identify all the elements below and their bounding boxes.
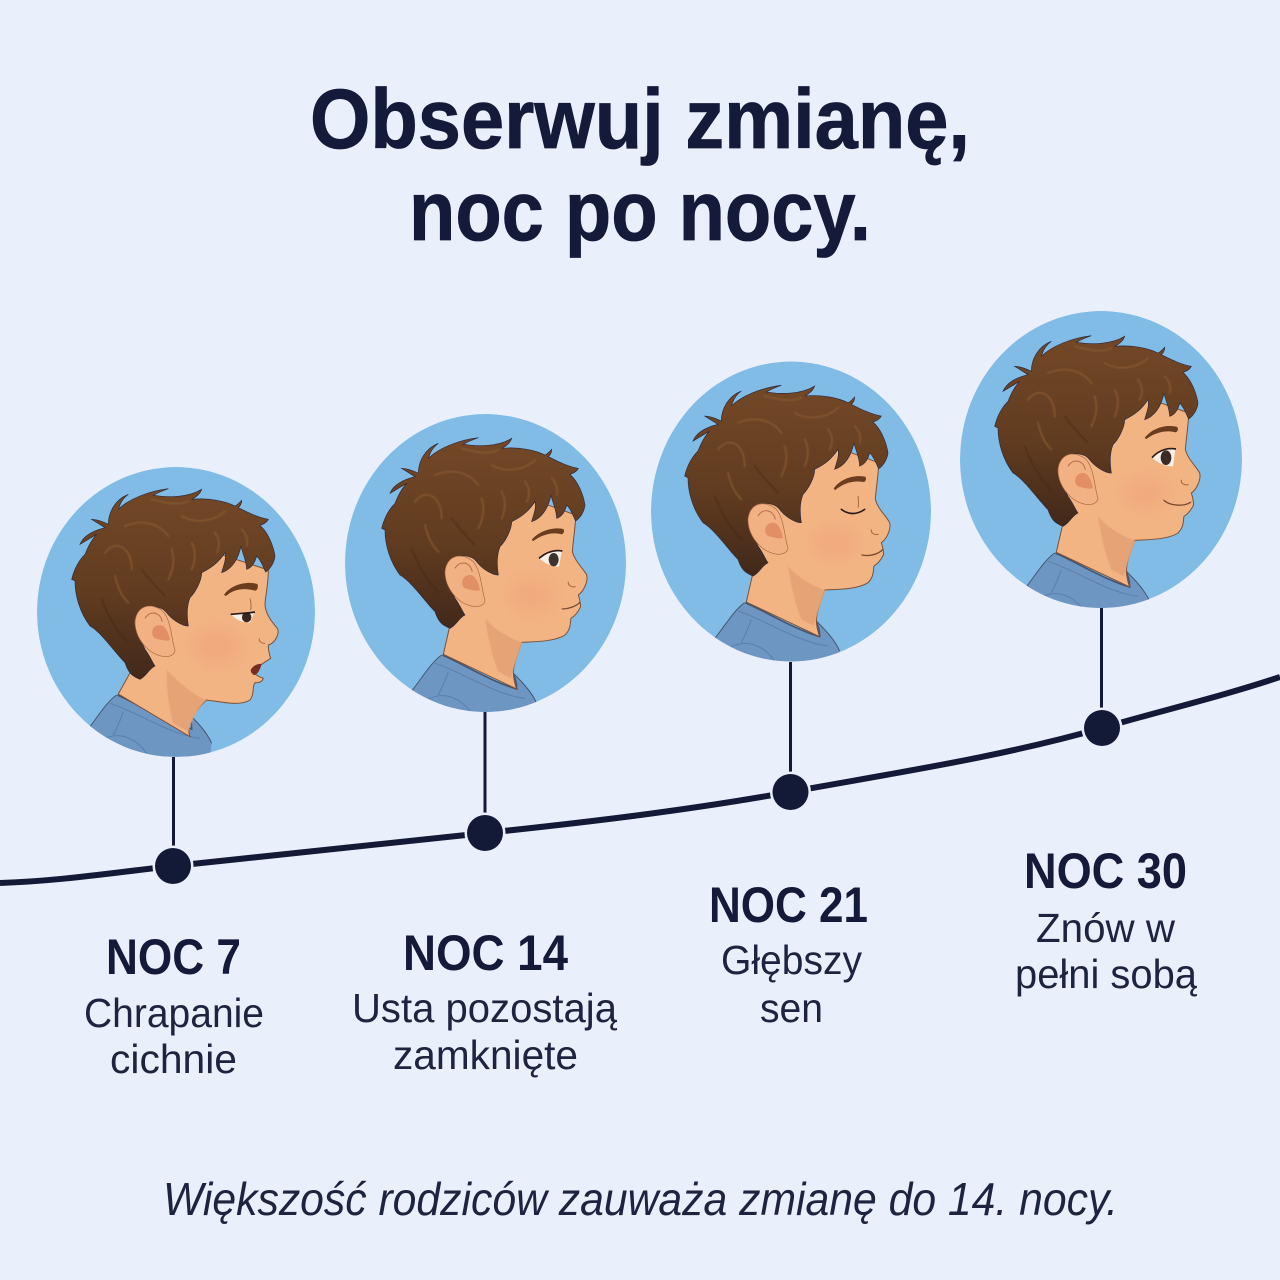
- label: NOC 30: NOC 30: [1024, 843, 1187, 899]
- connector stem: [484, 712, 486, 833]
- caption: zamknięte: [393, 1032, 578, 1078]
- node: [467, 815, 503, 851]
- stage: night 30: [960, 311, 1242, 997]
- title: noc po nocy.: [409, 164, 871, 258]
- caption: cichnie: [110, 1036, 237, 1082]
- node: [155, 848, 191, 884]
- title: [310, 72, 970, 258]
- stage: night 7: [37, 467, 315, 1082]
- node: [1084, 710, 1120, 746]
- stage: night 14: [345, 414, 626, 1078]
- label: NOC 7: NOC 7: [106, 929, 241, 985]
- label: NOC 14: NOC 14: [403, 925, 568, 981]
- connector stem: [172, 757, 175, 866]
- node: [772, 774, 808, 810]
- portrait: sleeping boy, eyes closed: [651, 362, 931, 664]
- connector stem: [1100, 608, 1103, 728]
- portrait: smiling boy: [960, 311, 1242, 615]
- title: Obserwuj zmianę,: [310, 72, 970, 166]
- caption: [721, 937, 862, 1031]
- caption: [352, 985, 617, 1078]
- portrait: snoring boy, mouth open: [37, 467, 315, 757]
- caption: [1015, 905, 1197, 997]
- label: NOC 21: NOC 21: [709, 877, 868, 933]
- caption: pełni sobą: [1015, 951, 1197, 997]
- connector stem: [789, 662, 792, 792]
- caption: Znów w: [1036, 905, 1175, 951]
- caption: [84, 990, 264, 1082]
- caption: Chrapanie: [84, 990, 264, 1036]
- caption: Usta pozostają: [352, 985, 617, 1031]
- footer note: Większość rodziców zauważa zmianę do 14. nocy.: [163, 1173, 1118, 1225]
- portrait: boy with closed mouth: [345, 414, 626, 717]
- timeline curve: [0, 677, 1280, 883]
- caption: Głębszy: [721, 937, 862, 983]
- caption: sen: [760, 985, 823, 1031]
- stage: night 21: [651, 362, 931, 1031]
